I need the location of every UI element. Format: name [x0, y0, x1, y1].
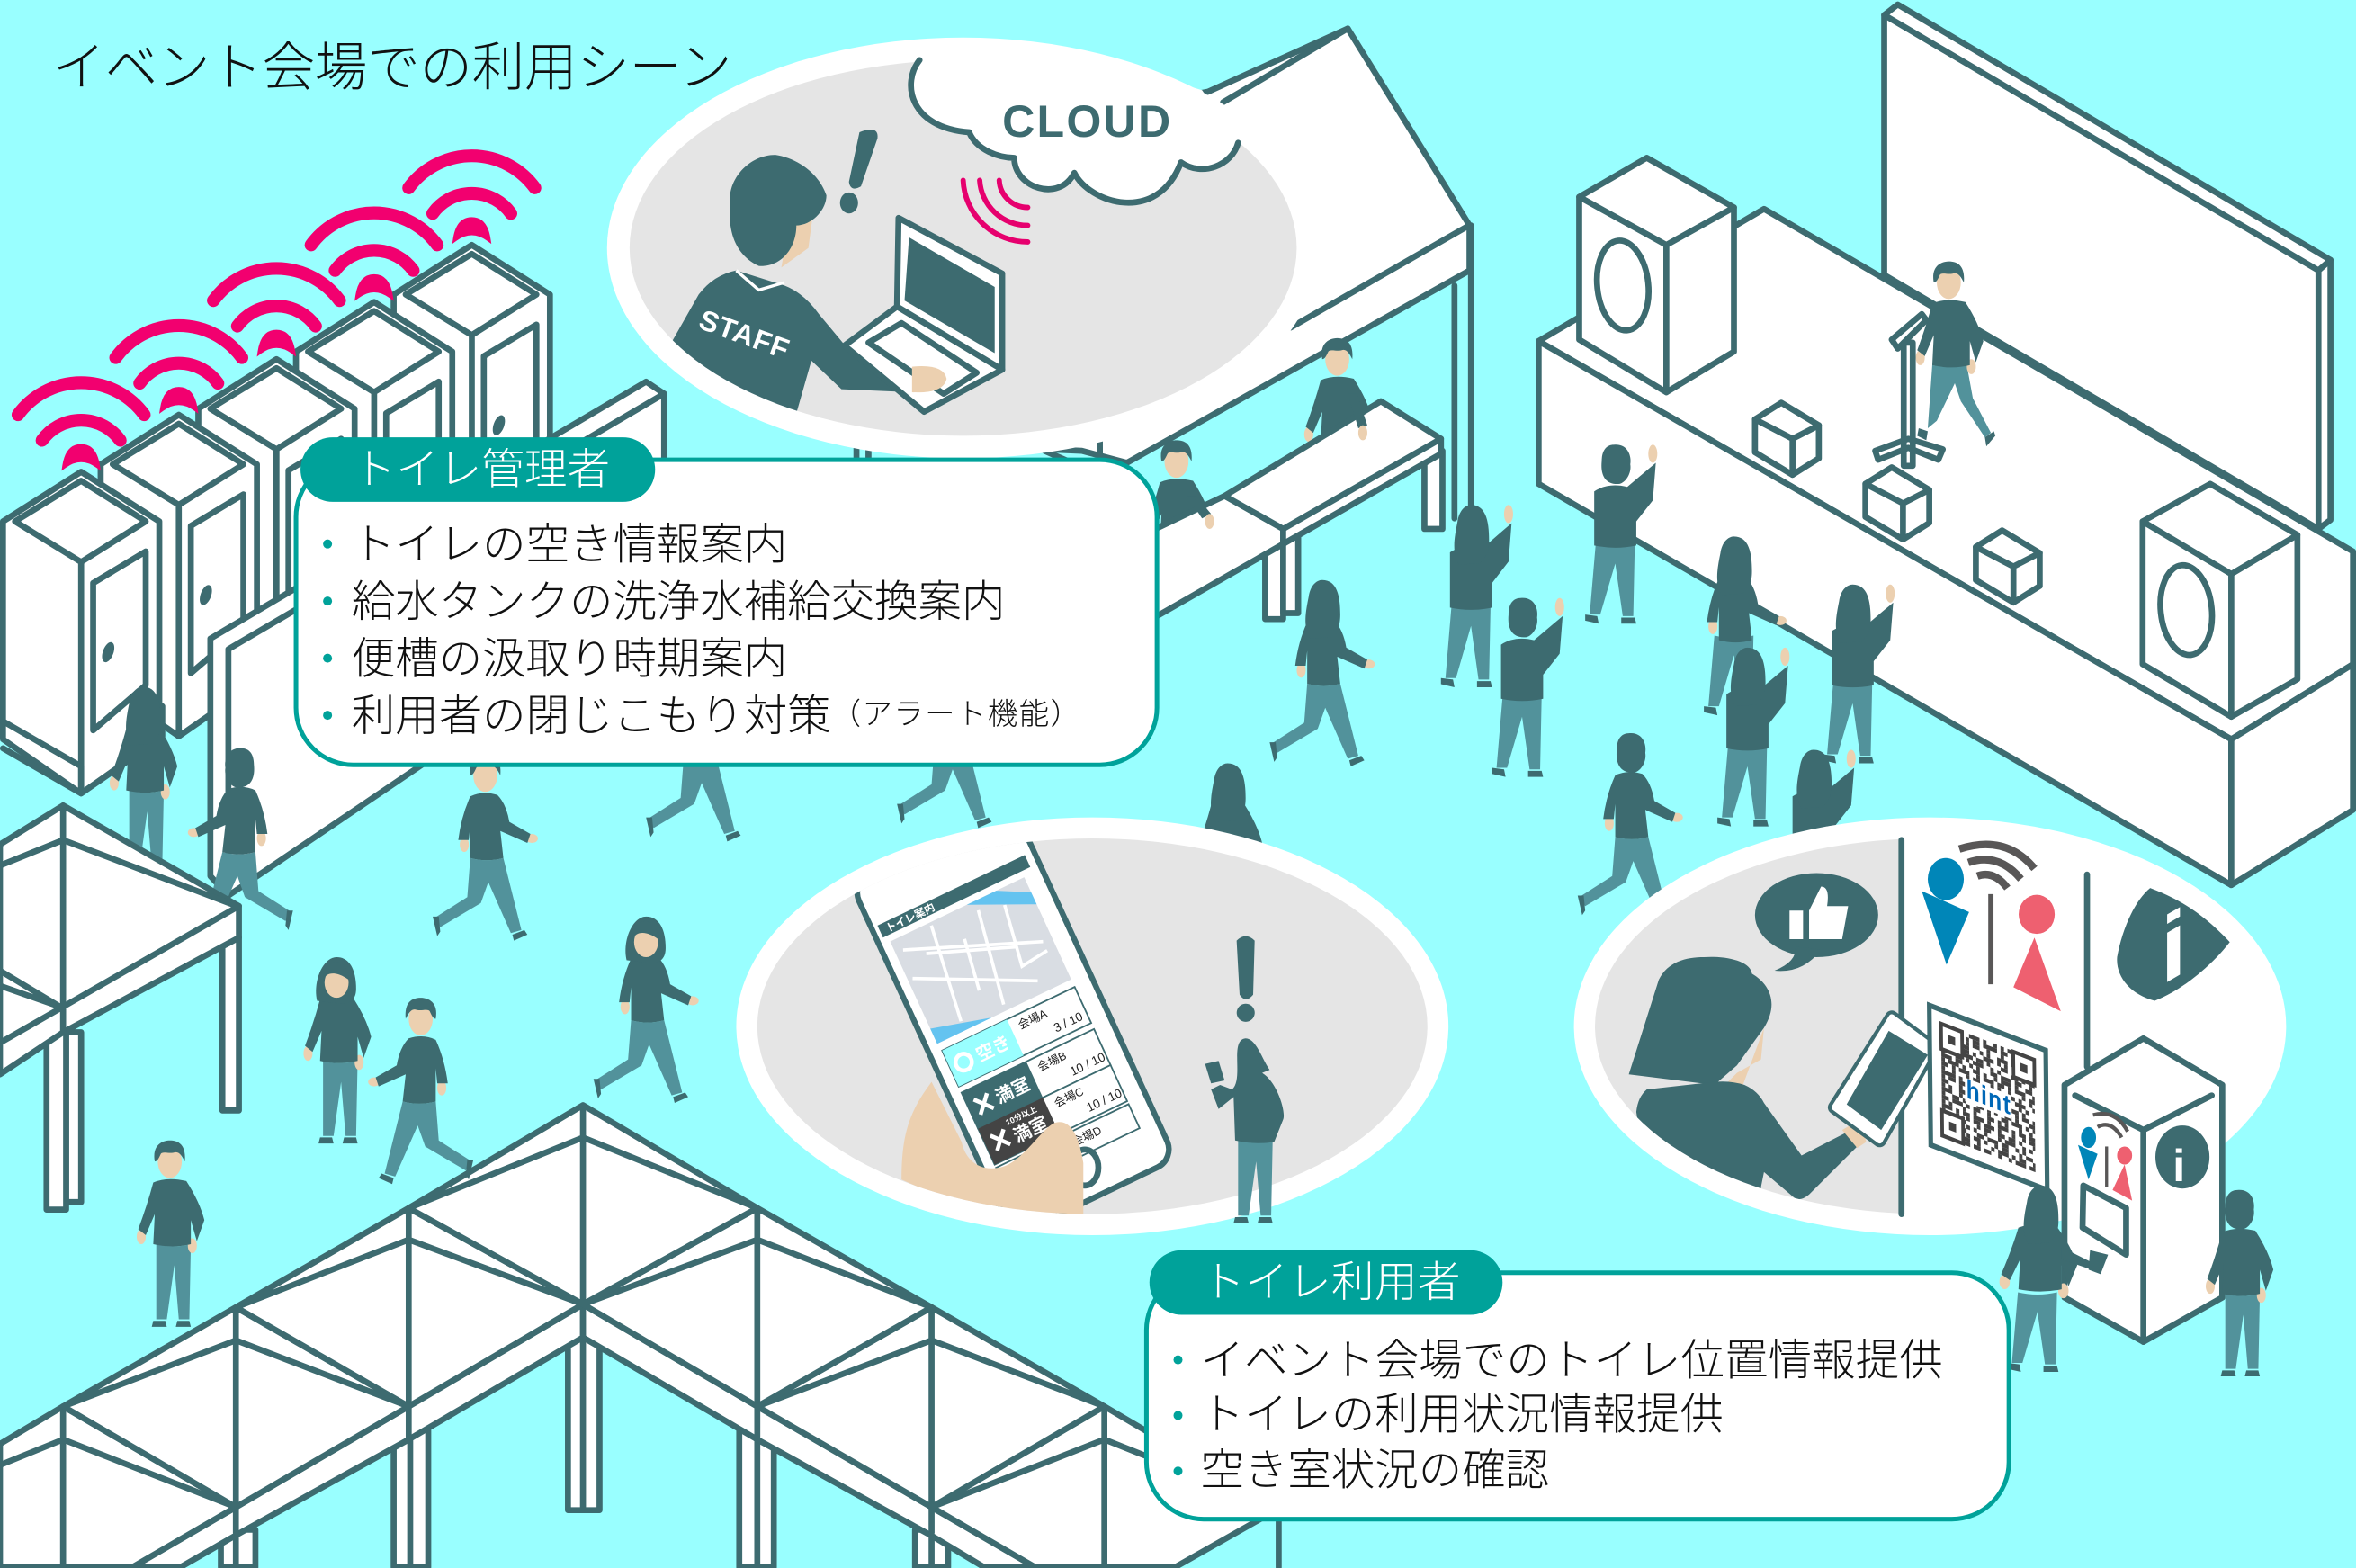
person beside kiosk	[2206, 1190, 2273, 1376]
bullet list: 給水タンクの洗浄水補給交換案内	[352, 578, 1005, 626]
toilet pictogram	[1922, 845, 2061, 1011]
person scanning at kiosk	[2000, 1186, 2108, 1372]
bullet list: トイレの空き情報案内	[352, 520, 787, 569]
person: woman behind bubble	[1784, 750, 1856, 928]
person: man waving center	[1492, 598, 1564, 777]
smartphone: 会場C	[1052, 1084, 1086, 1110]
QR code	[1930, 1005, 2047, 1190]
label text: トイレ管理者	[354, 446, 610, 494]
person: man walking with woman	[368, 998, 473, 1184]
person: woman standing	[303, 957, 372, 1143]
seated staff arms on tables	[1187, 394, 1367, 529]
exclamation mark	[840, 130, 878, 213]
person: woman waving	[1441, 505, 1513, 687]
stage boxes	[1755, 403, 2039, 603]
person: man standing	[137, 1141, 204, 1327]
kiosk info icon: i	[2172, 1141, 2185, 1191]
person: walker under callout	[646, 655, 751, 841]
speaker right	[2143, 484, 2298, 717]
performer on stage	[1916, 262, 1995, 446]
person: man walking center	[433, 755, 538, 941]
partition wall	[211, 381, 664, 896]
tablet	[1834, 1017, 1932, 1141]
reception tables	[1052, 401, 1442, 676]
QR code: hint	[1966, 1074, 2011, 1120]
tent first row left	[236, 1208, 583, 1406]
microphone stand	[1876, 314, 1943, 466]
laptop	[845, 218, 1002, 412]
thumbs-up speech bubble	[1755, 873, 1878, 971]
label pill	[1150, 1250, 1502, 1315]
smartphone: 10分以上	[1004, 1104, 1038, 1127]
bullet list: （アラート機能）	[831, 698, 1080, 731]
seated staff at tent	[1143, 338, 1372, 553]
speaker left	[1579, 157, 1734, 392]
smartphone: 10 / 10	[1068, 1050, 1107, 1079]
bullet list: 便槽の汲取り時期案内	[352, 634, 787, 683]
smartphone	[855, 842, 1171, 1214]
smartphone: 空き	[972, 1032, 1014, 1066]
event tent behind the staff bubble	[856, 29, 1471, 518]
information pictogram	[2117, 887, 2230, 1006]
tent first row right	[583, 1208, 932, 1406]
smartphone: 満室	[992, 1073, 1034, 1108]
visitors in center aisle	[137, 641, 1002, 1327]
seated person left	[1143, 440, 1211, 553]
lower tents grid	[0, 1106, 1278, 1567]
tent legs	[221, 1338, 948, 1567]
callout: toilet manager	[296, 437, 1157, 765]
smartphone: 10 / 10	[1085, 1086, 1124, 1115]
left eave band	[132, 1304, 583, 1567]
bullet list: 空き室状況の確認	[1201, 1446, 1549, 1494]
holding hand	[901, 1082, 1083, 1220]
bullet list: トイレの利用状況情報提供	[1201, 1390, 1724, 1438]
bullet list: イベント会場でのトイレ位置情報提供	[1201, 1336, 1943, 1384]
outer left tent	[0, 1406, 236, 1567]
wall edge lines	[1902, 840, 2087, 1214]
bullet list: 利用者の閉じこもり対策	[352, 692, 831, 740]
bubble: staff with laptop and cloud	[607, 38, 1320, 458]
information pictogram: i	[2161, 887, 2187, 1006]
person: woman walking	[594, 917, 699, 1103]
outer right tent	[932, 1406, 1278, 1567]
person: woman walking	[1269, 580, 1375, 766]
title: イベント会場での利用シーン	[52, 39, 731, 97]
smartphone: 会場A	[1016, 1007, 1050, 1032]
person: woman waving front	[1717, 648, 1789, 827]
callout: toilet user	[1146, 1250, 2009, 1519]
person: woman by toilets	[110, 686, 177, 873]
label text: トイレ利用者	[1202, 1259, 1461, 1306]
smartphone: 満室	[1010, 1113, 1052, 1147]
person: woman waving rear	[1823, 585, 1895, 764]
bullet list	[323, 520, 1080, 740]
smartphone: トイレ案内	[883, 900, 936, 935]
seated person right	[1304, 338, 1372, 451]
stage platform	[1538, 209, 2353, 885]
phone home button	[1071, 1150, 1098, 1186]
crowd in front of stage	[1195, 444, 1895, 950]
woman scanning QR	[1629, 957, 1857, 1220]
person: woman reaching	[1704, 536, 1787, 715]
left tent	[0, 805, 239, 1210]
label pill	[300, 437, 655, 502]
kiosk toilet icon	[2078, 1114, 2132, 1201]
person: woman behind phone bubble	[1195, 764, 1262, 950]
cloud	[911, 45, 1238, 202]
tent apex	[408, 1106, 757, 1304]
tent second row left	[63, 1307, 408, 1507]
portable toilets row with wifi	[3, 156, 550, 793]
person: walker under callout right	[897, 641, 1002, 828]
staff person: STAFF	[695, 303, 794, 365]
information kiosk	[2065, 1038, 2222, 1342]
tent second row right	[757, 1307, 1105, 1507]
smartphone: 会場B	[1035, 1048, 1069, 1074]
bullet list	[1173, 1336, 1943, 1494]
kiosk info icon	[2155, 1125, 2209, 1191]
person with phone	[1205, 1038, 1284, 1223]
person: man by wall	[188, 748, 293, 935]
right eave band	[583, 1304, 1035, 1567]
signal arcs	[963, 180, 1027, 242]
bubble: smartphone availability map	[736, 806, 1448, 1236]
stage back screen	[1885, 4, 2331, 529]
person: man walking	[1578, 733, 1683, 919]
hand on tablet	[1842, 1119, 1866, 1148]
staff person	[673, 155, 896, 411]
smartphone: 会場D	[1070, 1124, 1104, 1149]
bubble: QR code on signage	[1574, 818, 2286, 1235]
exclamation mark	[1237, 936, 1255, 1022]
person: man waving	[1585, 444, 1657, 623]
cloud label: CLOUD	[1002, 96, 1170, 147]
smartphone: 3 / 10	[1052, 1009, 1085, 1035]
